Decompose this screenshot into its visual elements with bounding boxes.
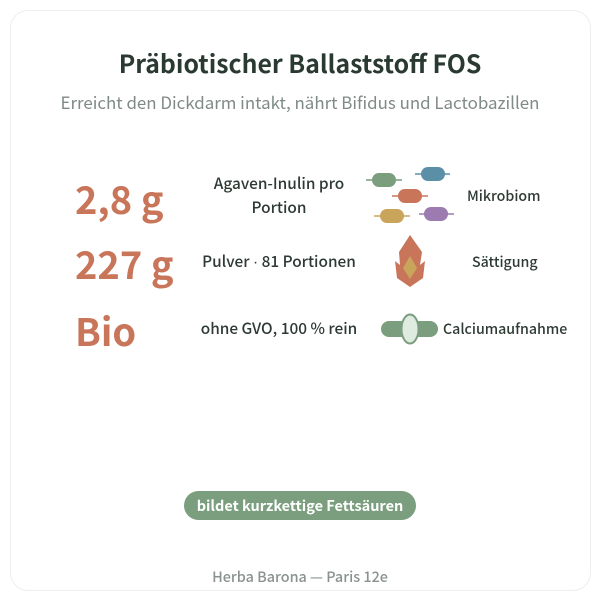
subtitle: Erreicht den Dickdarm intakt, nährt Bifidus und Lactobazillen xyxy=(61,89,539,114)
pill badge xyxy=(184,491,416,520)
icon label: Sättigung: Sättigung xyxy=(472,252,538,272)
pill badge: bildet kurzkettige Fettsäuren xyxy=(197,495,403,516)
stat: Bio: Bio xyxy=(75,302,136,357)
icon: calcium absorption xyxy=(381,314,438,344)
stat label: Pulver: Pulver · 81 Portionen xyxy=(202,250,356,272)
title: Präbiotischer Ballaststoff FOS xyxy=(119,45,481,81)
footer: Herba Barona — Paris 12e xyxy=(212,566,388,587)
icon: flame xyxy=(395,235,425,287)
icon: microbiome bacteria xyxy=(366,167,454,223)
stat: 2,8 g: 2,8 g xyxy=(75,170,164,225)
icon label: Mikrobiom: Mikrobiom xyxy=(467,186,541,206)
icon label: Calciumaufnahme: Calciumaufnahme xyxy=(443,319,567,339)
stat label: ohne GVO: ohne GVO, 100 % rein xyxy=(201,317,357,339)
stat: 227 g: 227 g xyxy=(75,235,174,290)
stat label: Agaven-Inulin pro Portion: Agaven-Inulin pro Portion xyxy=(214,172,344,218)
